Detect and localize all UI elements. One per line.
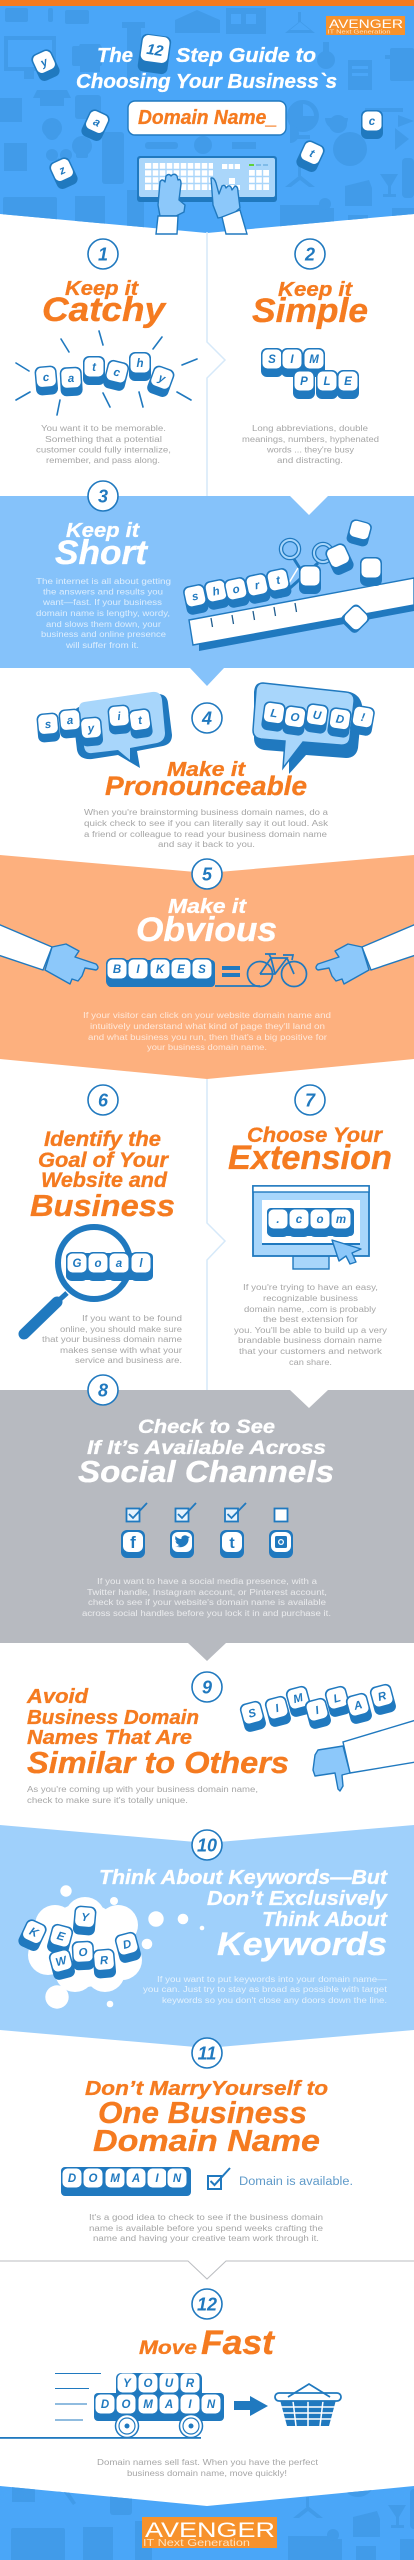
truck made of keys: O <box>144 2378 153 2390</box>
keys: domain: D <box>68 2173 76 2185</box>
text: step 1: You want it to be memorable. <box>41 424 166 433</box>
text: step 6: that your business domain name <box>42 1335 183 1344</box>
text: step 10: keywords so you don't close any doors down the line. <box>162 1996 387 2005</box>
keys: domain: N <box>173 2173 182 2185</box>
heading: Identify the Goal: Business <box>30 1188 175 1223</box>
keys: keyword: Y <box>81 1912 91 1924</box>
icon: monitor with .com keys <box>253 1186 369 1269</box>
heading: Similar to Others: Names That Are <box>27 1727 192 1749</box>
keys: say it: t <box>137 715 144 727</box>
heading: One Business Domain Name: One Business <box>98 2095 307 2130</box>
keys: bikes: E <box>177 964 185 976</box>
keys: simple: I <box>290 354 294 366</box>
text: step 11 <box>89 2213 324 2243</box>
keys: catchy with rays <box>16 331 197 415</box>
text: step 3 <box>36 577 171 650</box>
heading: Identify the Goal <box>30 1128 175 1223</box>
keys: short: r <box>254 580 261 592</box>
keys: loud: O <box>290 711 300 725</box>
number 11 <box>192 2038 222 2068</box>
keys: simple: E <box>344 376 352 388</box>
heading: Keywords: Think About Keywords—But <box>99 1867 388 1889</box>
keys: loud: ! <box>360 712 366 724</box>
keys: simple: P <box>300 376 308 388</box>
text: step 5: If your visitor can click on your website domain name and <box>83 1011 331 1020</box>
panel: step 11 <box>61 2038 353 2243</box>
number 10 <box>192 1830 222 1860</box>
floating keys <box>29 47 383 191</box>
heading: Similar to Others: Similar to Others <box>27 1745 289 1780</box>
keys: short <box>182 518 382 616</box>
keys: catchy with rays: y <box>156 372 167 386</box>
ground line <box>0 2437 201 2439</box>
keys: keyword: R <box>99 1955 109 1967</box>
footer icon pattern <box>11 2487 414 2560</box>
keys: bikes: S <box>198 964 206 976</box>
heading: Keep it Catchy: Catchy <box>42 291 167 329</box>
keys: loud: D <box>335 713 345 727</box>
heading: Keep it Short <box>55 520 149 572</box>
heading: Keywords: Don’t Exclusively <box>207 1888 388 1910</box>
keys: similar: I <box>314 1705 321 1717</box>
text: step 6: online, you should make sure <box>60 1325 183 1334</box>
floating keys: y <box>38 56 50 70</box>
text: step 8 <box>82 1577 331 1618</box>
number 2: 2 <box>304 244 315 264</box>
icon: thumbs down <box>313 1720 414 1791</box>
icon: checkbox <box>208 2168 230 2189</box>
keys: simple: M <box>309 354 319 366</box>
domain name box: Domain Name_ <box>138 107 277 129</box>
icon: monitor with .com keys: . <box>276 1214 280 1226</box>
logo: Avenger <box>326 16 405 36</box>
panel: step 3 <box>0 481 414 686</box>
icon: bicycle <box>215 954 306 986</box>
keys: domain <box>61 2167 191 2196</box>
text: step 3: business and online presence <box>41 630 167 639</box>
panel: step 8 <box>0 1375 414 1661</box>
speech bubble: loud <box>253 683 362 774</box>
heading: Make it Pronounceable: Pronounceable <box>105 771 307 801</box>
heading: Choose Your Extension: Choose Your <box>247 1124 384 1147</box>
speech bubble: say it <box>73 692 172 768</box>
number 10: 10 <box>197 1836 217 1856</box>
heading: Make it Pronounceable <box>105 759 307 801</box>
text: step 10: you can. Just try to stay as broad as possible with target <box>143 1985 388 1994</box>
floating keys: c <box>369 116 376 128</box>
text: step 7: the best extension for <box>263 1315 358 1324</box>
icon: magnifying glass with keys: a <box>116 1258 123 1270</box>
top orange bar <box>0 0 414 6</box>
heading: Similar to Others <box>26 1686 289 1780</box>
text: step 8: across social handles before you lock it in and purchase it. <box>82 1609 331 1618</box>
text: step 2: words ... they're busy <box>266 446 354 454</box>
equals sign <box>222 966 240 977</box>
truck made of keys: N <box>207 2399 216 2411</box>
header panel <box>0 6 414 234</box>
illustration: ruler <box>189 578 414 651</box>
keys: catchy with rays: a <box>68 373 75 385</box>
text: step 10 <box>143 1975 388 2005</box>
text: step 7: brandable business domain name <box>238 1336 383 1345</box>
text: step 12 <box>97 2458 319 2478</box>
keys: similar: L <box>332 1692 342 1706</box>
text: step 10: If you want to put keywords into your domain name— <box>157 1975 387 1984</box>
text: step 4: and say it back to you. <box>158 840 255 849</box>
keys: catchy with rays: c <box>112 366 122 380</box>
panel: step 10 <box>0 1825 414 2048</box>
illustration: cloud <box>28 1885 204 2009</box>
heading: Move Fast: Fast <box>201 2324 276 2362</box>
text: step 3: will suffer from it. <box>65 641 139 650</box>
text: step 8: Twitter handle, Instagram account, or Pinterest account, <box>87 1588 327 1597</box>
number 8: 8 <box>98 1380 108 1400</box>
number 7: 7 <box>305 1090 316 1110</box>
keys: say it: a <box>66 715 74 727</box>
text: step 8: If you want to have a social media presence, with a <box>97 1577 318 1586</box>
text: step 1: customer could fully internalize, <box>36 446 171 454</box>
icon: magnifying glass with keys: l <box>139 1258 143 1270</box>
icon: monitor with .com keys: c <box>296 1214 303 1226</box>
text: step 7: can share. <box>289 1358 332 1367</box>
heading: Make it Obvious: Obvious <box>136 911 277 949</box>
keys: keyword: W <box>54 1954 69 1969</box>
text: step 7 <box>234 1283 387 1367</box>
text: step 4: When you're brainstorming business domain names, do a <box>84 808 329 817</box>
keys: domain: M <box>110 2173 120 2185</box>
social keys: t <box>229 1535 235 1552</box>
keys: catchy with rays: h <box>136 358 144 370</box>
number 5 <box>192 859 222 889</box>
floating keys: a <box>91 116 103 130</box>
icon: magnifying glass with keys <box>24 1227 153 1334</box>
logo: Avenger footer: IT Next Generation <box>143 2537 250 2549</box>
heading: Social Channels: Social Channels <box>78 1454 334 1489</box>
keys: similar: M <box>292 1692 305 1706</box>
logo: Avenger: IT Next Generation <box>328 30 390 36</box>
keys: short: t <box>275 574 282 587</box>
keys: simple <box>261 348 359 399</box>
icon: magnifying glass with keys: o <box>94 1258 102 1270</box>
keys: keyword: E <box>55 1930 66 1944</box>
text: step 3: want—fast. If your business <box>42 598 162 607</box>
truck made of keys: M <box>143 2399 153 2411</box>
heading: Similar to Others: Avoid <box>26 1686 89 1708</box>
right pointing hand <box>316 924 414 984</box>
heading: Make it Pronounceable: Make it <box>167 759 247 781</box>
text: step 9: As you're coming up with your business domain name, <box>27 1785 258 1794</box>
text: step 7: recognizable business <box>263 1294 358 1303</box>
keys: bikes: B <box>113 964 121 976</box>
domain name box <box>128 101 286 135</box>
keys: keyword: K <box>27 1926 41 1940</box>
keys: loud: U <box>312 709 322 723</box>
keys: similar: I <box>274 1703 281 1715</box>
keys: simple: S <box>268 354 276 366</box>
panel: steps 6 and 7 <box>24 1079 392 1390</box>
heading: Move Fast <box>139 2324 276 2362</box>
speed lines <box>55 2374 101 2420</box>
text: step 3: The internet is all about getting <box>36 577 171 586</box>
number 12: 12 <box>197 2294 217 2314</box>
icon: monitor with .com keys: m <box>336 1214 346 1226</box>
title: Choosing Your Business`s <box>76 71 337 93</box>
number 12 <box>192 2289 222 2319</box>
panel: step 12 <box>0 2261 414 2478</box>
title: The <box>97 45 133 67</box>
keys: domain: O <box>89 2173 98 2185</box>
text: step 4: quick check to see if you can literally say it out loud. Ask <box>84 819 329 828</box>
heading: Social Channels: Check to See <box>138 1417 275 1438</box>
keys: loud <box>261 701 376 738</box>
panel: step 5 <box>0 855 414 1079</box>
heading: One Business Domain Name: Domain Name <box>93 2123 320 2158</box>
heading: One Business Domain Name: Don’t MarryYourself to <box>85 2078 328 2100</box>
logo: Avenger footer <box>142 2517 277 2549</box>
text: step 3: the answers and results you <box>43 588 163 597</box>
number 3 <box>88 481 118 511</box>
keys: domain: A <box>131 2173 140 2185</box>
number 1 <box>88 239 118 269</box>
heading: Keep it Simple: Simple <box>252 292 368 330</box>
checkboxes <box>126 1503 288 1522</box>
heading: Keep it Short: Keep it <box>66 520 140 542</box>
text: step 7: you. You'll be able to build up a very <box>234 1326 387 1335</box>
keys: say it <box>36 704 153 747</box>
illustration: scissors <box>280 540 332 597</box>
text: step 5 <box>83 1011 331 1052</box>
keys: catchy with rays: t <box>92 362 97 374</box>
truck made of keys: Y <box>123 2378 132 2390</box>
heading: Make it Obvious: Make it <box>168 896 248 918</box>
left pointing hand <box>0 924 98 984</box>
title: Step Guide to <box>176 45 316 67</box>
heading: Keywords: Keywords <box>217 1926 387 1962</box>
keys: short: o <box>232 583 241 597</box>
heading: Social Channels <box>78 1417 334 1489</box>
truck made of keys: I <box>188 2399 192 2411</box>
number 7 <box>295 1085 325 1115</box>
heading: Keep it Short: Short <box>55 534 149 572</box>
text: step 4: a friend or colleague to read your business domain name <box>84 830 328 839</box>
truck made of keys: U <box>165 2378 174 2390</box>
text: step 12: business domain name, move quickly! <box>127 2469 287 2478</box>
heading: Keywords: Think About <box>262 1909 388 1931</box>
text: step 4 <box>84 808 329 849</box>
keys: short: s <box>191 590 200 604</box>
number 2 <box>295 239 325 269</box>
text: step 1: Something that a potential <box>45 435 162 444</box>
hands on keyboard <box>156 174 247 234</box>
text: step 6: makes sense with what your <box>60 1346 182 1355</box>
text: step 1: remember, and pass along. <box>46 456 160 465</box>
truck made of keys <box>94 2373 224 2438</box>
text: step 3: domain name is lengthy, wordy, <box>36 609 170 618</box>
panel: step 4 <box>36 683 376 849</box>
keys: similar: S <box>247 1707 258 1721</box>
truck made of keys: A <box>164 2399 173 2411</box>
text: step 2 <box>242 424 379 465</box>
heading: Choose Your Extension: Extension <box>228 1139 392 1177</box>
panel: steps 1 and 2 <box>16 232 379 496</box>
number 11: 11 <box>198 2044 216 2064</box>
title <box>76 45 337 93</box>
text: step 2: Long abbreviations, double <box>252 424 369 433</box>
arrow <box>234 2396 268 2416</box>
keys: keyword: O <box>78 1947 88 1959</box>
keys: keyword <box>16 1905 142 1981</box>
text: step 5: intuitively understand what kind of page they'll land on <box>90 1022 325 1031</box>
keys: catchy with rays: c <box>42 372 50 384</box>
text: step 5: your business domain name. <box>147 1043 267 1052</box>
truck made of keys: O <box>122 2399 131 2411</box>
heading: Make it Obvious <box>136 896 277 949</box>
text: step 6: If you want to be found <box>82 1314 182 1323</box>
key: 12: 12 <box>145 41 165 60</box>
keys: similar: R <box>377 1690 388 1704</box>
heading: Social Channels: If It’s Available Across <box>87 1438 326 1459</box>
text: step 1 <box>36 424 171 465</box>
number 3: 3 <box>98 486 108 506</box>
text: step 6 <box>42 1314 183 1365</box>
text: step 7: domain name, .com is probably <box>244 1305 376 1314</box>
keyboard <box>137 156 277 202</box>
text: step 7: that your customers and network <box>239 1347 383 1356</box>
logo: Avenger: AVENGER <box>329 17 403 31</box>
icon: monitor with .com keys: o <box>316 1214 324 1226</box>
truck made of keys: R <box>186 2378 195 2390</box>
text: step 2: and distracting. <box>277 456 343 465</box>
keys: keyword: D <box>122 1938 133 1952</box>
social keys <box>121 1530 293 1558</box>
text: step 11: name is available before you spend weeks crafting the <box>89 2224 324 2233</box>
text: step 5: and what business you run, then that's a big positive for <box>88 1033 327 1042</box>
keys: short: h <box>212 585 221 599</box>
background icon pattern <box>0 8 414 233</box>
heading: Move Fast: Move <box>139 2338 198 2359</box>
heading: Similar to Others: Business Domain <box>27 1707 199 1729</box>
heading: Identify the Goal: Identify the <box>44 1128 161 1151</box>
keys: simple: L <box>323 376 331 388</box>
number 4: 4 <box>201 708 212 728</box>
footer panel <box>0 2486 414 2560</box>
keys: say it: y <box>86 723 95 735</box>
icon: shopping basket <box>275 2384 341 2426</box>
logo: Avenger footer: AVENGER <box>145 2519 275 2542</box>
text: step 3: and slows them down, your <box>46 620 161 629</box>
heading: One Business Domain Name <box>85 2078 328 2158</box>
heading: Keep it Simple: Keep it <box>278 279 353 301</box>
text: step 9 <box>27 1785 258 1805</box>
keys: loud: L <box>270 708 278 720</box>
number 4 <box>192 703 222 733</box>
number 6 <box>88 1085 118 1115</box>
heading: Identify the Goal: Goal of Your <box>38 1149 170 1172</box>
keys: say it: i <box>117 711 122 723</box>
heading: Identify the Goal: Website and <box>41 1169 168 1192</box>
heading: Keep it Catchy <box>42 278 167 329</box>
truck made of keys: D <box>101 2399 109 2411</box>
keys: bikes: I <box>136 964 140 976</box>
keys: similar: A <box>352 1699 364 1713</box>
text: step 11: name and having your creative team work through it. <box>93 2234 319 2243</box>
keys: say it: s <box>44 719 52 731</box>
heading: Keep it Catchy: Keep it <box>65 278 139 300</box>
keys: bikes <box>106 958 215 987</box>
text: step 6: service and business are. <box>75 1356 182 1365</box>
keys: bikes: K <box>156 964 165 976</box>
text: step 9: check to make sure it's totally unique. <box>27 1796 188 1805</box>
text: step 12: Domain names sell fast. When you have the perfect <box>97 2458 319 2467</box>
text: step 8: check to see if your website's domain name is available <box>88 1598 327 1607</box>
floating keys: t <box>307 148 317 161</box>
number 8 <box>88 1375 118 1405</box>
icon: magnifying glass with keys: G <box>73 1258 82 1270</box>
keys: similar <box>239 1683 397 1733</box>
heading: Keywords <box>99 1867 388 1962</box>
number 6: 6 <box>98 1090 109 1110</box>
keys: domain: I <box>155 2173 159 2185</box>
text: step 7: If you're trying to have an easy, <box>243 1283 378 1292</box>
number 1: 1 <box>98 244 108 264</box>
panel: step 9 <box>26 1672 414 1805</box>
key: 12 <box>137 33 172 75</box>
floating keys: z <box>56 164 68 178</box>
label: domain is available: Domain is available. <box>239 2176 353 2188</box>
text: step 11: It's a good idea to check to see if the business domain <box>89 2213 323 2222</box>
number 9: 9 <box>202 1678 212 1698</box>
text: step 2: meanings, numbers, hyphenated <box>242 435 379 444</box>
number 9 <box>192 1672 222 1702</box>
number 5: 5 <box>202 864 213 884</box>
social keys: f <box>130 1533 136 1552</box>
